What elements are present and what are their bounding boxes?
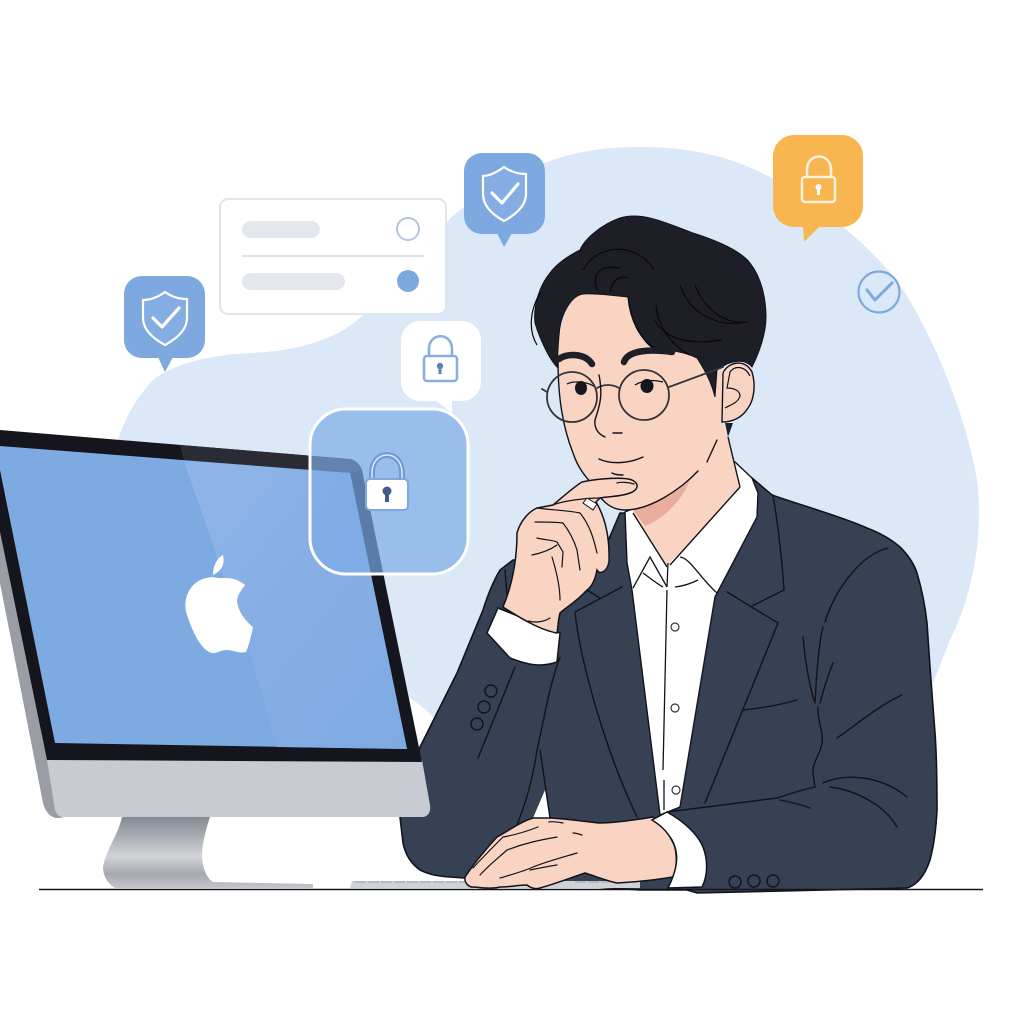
jacket lapels and creases bbox=[471, 495, 907, 888]
eyes bbox=[575, 379, 654, 395]
monitor screen bbox=[0, 446, 407, 749]
icon: shield badge left bbox=[124, 276, 205, 372]
gap between arm and torso bbox=[533, 790, 550, 818]
eyebrows bbox=[559, 351, 672, 364]
icon: white lock badge bbox=[401, 321, 481, 413]
jacket bbox=[400, 478, 937, 893]
shirt buttons bbox=[671, 623, 680, 794]
panel: settings card bbox=[220, 199, 446, 314]
neck bbox=[633, 420, 740, 567]
icon: shield badge top bbox=[464, 153, 545, 247]
cuff left bbox=[487, 608, 560, 665]
monitor black bezel bbox=[0, 430, 422, 762]
shirt bbox=[625, 462, 758, 815]
floating glass lock panel bbox=[310, 409, 468, 574]
desk line bbox=[39, 888, 983, 890]
head bbox=[558, 290, 722, 510]
glasses bbox=[542, 367, 723, 422]
icon: orange lock badge bbox=[773, 135, 863, 242]
hair strands bbox=[531, 249, 748, 355]
background blob bbox=[118, 147, 979, 725]
person bbox=[350, 216, 937, 893]
icon: check circle bbox=[858, 272, 900, 312]
nose and mouth bbox=[595, 375, 643, 475]
keyboard bbox=[350, 881, 640, 888]
sleeve cuff right bbox=[652, 812, 707, 888]
monitor stand bbox=[103, 817, 313, 888]
ear bbox=[722, 363, 754, 422]
collar lines bbox=[633, 557, 717, 810]
hair bbox=[535, 216, 766, 397]
typing hand bbox=[465, 817, 676, 889]
monitor bbox=[0, 430, 430, 888]
raised hand bbox=[503, 478, 637, 633]
apple logo bbox=[185, 555, 253, 653]
monitor silver body bbox=[0, 532, 430, 817]
